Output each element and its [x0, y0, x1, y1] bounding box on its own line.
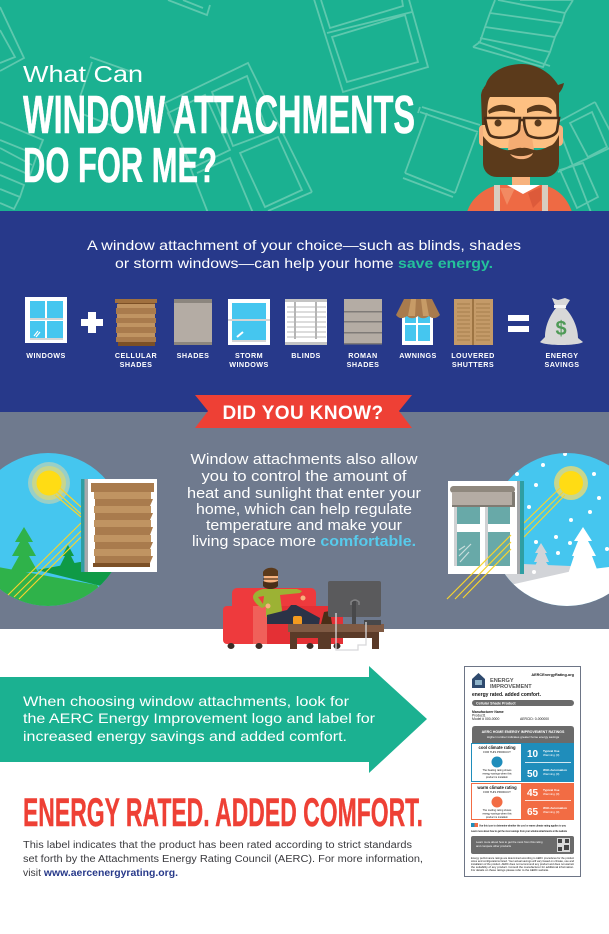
icon labels: CELLULAR: [115, 351, 158, 360]
energy label: [464, 666, 580, 876]
warm climate rating: Typical Use: [543, 788, 560, 792]
icon: louvered shutters: [454, 299, 493, 345]
energy label: Higher number indicates greater home energy savings: [487, 735, 560, 739]
intro text: or storm windows—can help your home save energy.: [115, 255, 493, 271]
cool climate rating: FOR THIS PRODUCT: [483, 750, 511, 754]
title: [23, 61, 415, 193]
warm climate rating: FOR THIS PRODUCT: [483, 790, 511, 794]
paragraph: [187, 452, 421, 550]
cool climate rating: cool climate rating: [478, 745, 516, 750]
arrow callout: increased energy savings and added comfort.: [23, 729, 347, 744]
description text: set forth by the Attachments Energy Rating Council (AERC). For more information,: [23, 854, 423, 865]
icon: equals: [508, 315, 529, 332]
icon: storm windows: [228, 299, 270, 345]
energy label: sizes and configurations listed. Your actual savings will vary based on climate, use and: [471, 859, 575, 863]
icon: awnings: [396, 299, 440, 345]
intro text: A window attachment of your choice—such as blinds, shades: [87, 237, 521, 253]
icon labels: SHUTTERS: [452, 360, 494, 369]
logo: IMPROVEMENT: [490, 684, 532, 690]
energy label: installation of the product. AERC does not recommend any product and does not warrant: [471, 862, 574, 866]
icon labels: SHADES: [120, 360, 152, 369]
cool climate rating: product is installed.: [486, 775, 508, 779]
warm climate rating: product is installed.: [486, 815, 508, 819]
energy label: Manufacturer Name: [472, 710, 504, 714]
description text: [23, 840, 423, 879]
cool climate rating: Warming (0): [543, 753, 559, 757]
cool climate rating: 50: [527, 769, 539, 780]
icon labels: STORM: [235, 351, 263, 360]
arrow callout: the AERC Energy Improvement logo and label for: [23, 711, 375, 726]
warm climate rating: Warming (0): [543, 810, 559, 814]
icon labels: AWNINGS: [399, 351, 437, 360]
energy label: Use this icon to determine whether the cool or warm climate rating applies to you: [479, 824, 566, 828]
warm climate rating: warm climate rating: [476, 785, 517, 790]
logo: ENERGY: [490, 678, 514, 684]
icon labels: ENERGY: [545, 351, 579, 360]
cool climate rating: energy savings when this: [482, 772, 512, 776]
energy label: AERCEnergyRating.org: [531, 673, 575, 677]
energy label: energy rated. added comfort.: [472, 692, 541, 698]
paragraph: heat and sunlight that enter your: [187, 486, 421, 502]
description text: visit www.aercenergyrating.org.: [23, 868, 178, 879]
energy label: AERCID: 0-000000: [520, 717, 549, 721]
warm climate rating: [472, 783, 574, 820]
illustration: man relaxing on sofa: [223, 568, 384, 650]
energy label: Cellular Shade Product: [476, 702, 516, 706]
scene: winter with roller shade: [447, 452, 609, 620]
warm climate rating: Warming (0): [543, 792, 559, 796]
warm climate rating: With Automation: [543, 806, 567, 810]
warm climate rating: 65: [527, 807, 539, 818]
icon: blinds: [285, 299, 327, 345]
icon labels: BLINDS: [291, 351, 321, 360]
warm climate rating: energy savings when this: [482, 812, 512, 816]
icon: cellular shades: [115, 299, 157, 346]
cool climate rating: [472, 743, 574, 782]
energy label: Learn more about how to get the most from this rating: [476, 840, 543, 844]
icon labels: WINDOWS: [26, 351, 66, 360]
energy label: Energy performance ratings are determined according to AERC procedures for the product: [471, 856, 574, 860]
logo: [472, 673, 532, 690]
title: DO FOR ME?: [23, 139, 217, 193]
energy label: AERC HOME ENERGY IMPROVEMENT RATINGS: [482, 730, 565, 734]
icon labels: SHADES: [347, 360, 379, 369]
energy label: Model # 000-0000: [472, 717, 499, 721]
description text: This label indicates that the product has been rated according to strict standards: [23, 840, 412, 851]
icon labels: LOUVERED: [451, 351, 495, 360]
arrow callout: When choosing window attachments, look for: [23, 694, 349, 709]
icon: roman shades: [344, 299, 382, 344]
intro text: [87, 237, 521, 271]
icon labels: [26, 351, 579, 369]
icon labels: SHADES: [177, 351, 209, 360]
ribbon heading: DID YOU KNOW?: [222, 403, 384, 424]
paragraph: temperature and make your: [206, 518, 402, 534]
icon: shades: [174, 299, 212, 345]
cool climate rating: With Automation: [543, 768, 567, 772]
paragraph: you to control the amount of: [202, 469, 408, 485]
icon labels: WINDOWS: [229, 360, 269, 369]
icon labels: ROMAN: [348, 351, 378, 360]
energy label: and compare other products: [476, 844, 512, 848]
icon: windows: [25, 297, 67, 343]
panel: header: [0, 0, 609, 215]
paragraph: Window attachments also allow: [190, 452, 418, 468]
icon: money bag: [540, 298, 583, 345]
cool climate rating: 10: [527, 749, 539, 760]
cool climate rating: The heating rating shows: [483, 768, 512, 772]
panel: energy savings equation: [0, 211, 609, 412]
icon: plus: [81, 312, 103, 333]
warm climate rating: The cooling rating shows: [483, 808, 512, 812]
icon: money bag: $: [555, 318, 567, 340]
paragraph: living space more comfortable.: [192, 534, 416, 550]
icon: bearded man: [467, 64, 572, 212]
paragraph: home, which can help regulate: [196, 502, 412, 518]
warm climate rating: 45: [527, 788, 539, 799]
coffee table: [288, 624, 384, 649]
cool climate rating: Typical Use: [543, 749, 560, 753]
energy label: the suitability of any product. Consult the manufacturer for additional information.: [471, 865, 574, 869]
scene: summer with cellular shade: [0, 453, 157, 606]
energy label: For details on these ratings please refer to the AERC website.: [471, 868, 549, 872]
icon labels: SAVINGS: [545, 360, 579, 369]
ribbon heading: [195, 395, 412, 428]
panel: did you know: [0, 395, 609, 640]
man: [253, 568, 332, 625]
energy label: Product1: [472, 714, 486, 718]
television: [328, 581, 381, 625]
title: What Can: [23, 61, 143, 87]
arrow callout: [0, 666, 427, 773]
cool climate rating: Warming (0): [543, 772, 559, 776]
energy label: Learn more about how to get the most savings from your window attachments at the website: [471, 829, 567, 833]
background window outlines: [0, 0, 609, 215]
